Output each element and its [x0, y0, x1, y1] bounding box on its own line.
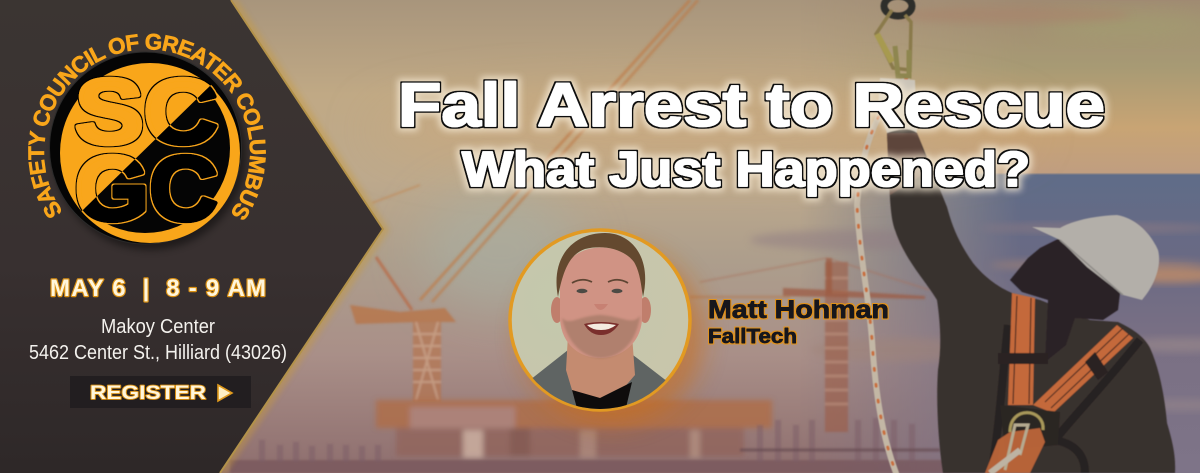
- speaker photo: [510, 230, 704, 425]
- logo letters SC GC, lower half: SC: [75, 61, 218, 163]
- logo letters SC GC, upper half: SC: [75, 61, 218, 163]
- venue address: 5462 Center St., Hilliard (43026): [29, 342, 287, 364]
- ears: [551, 297, 560, 323]
- venue address: [29, 316, 287, 364]
- subtitle: What Just Happened?: [462, 143, 1030, 197]
- body: [887, 129, 1175, 473]
- glove: [878, 78, 917, 135]
- scarf: [1010, 238, 1120, 362]
- platform structure: [376, 400, 772, 458]
- logo letters SC GC, upper half: [74, 76, 210, 212]
- black tee: [572, 382, 632, 412]
- beard: [562, 315, 640, 358]
- left dark panel: [0, 0, 385, 473]
- construction cranes and platform: [350, 0, 930, 432]
- title: Fall Arrest to Rescue: [398, 71, 1105, 139]
- right crane: [690, 258, 930, 432]
- logo letters SC GC, upper half: GC: [75, 138, 218, 240]
- face: [560, 248, 642, 358]
- speaker organization: FallTech: [708, 325, 797, 348]
- buckle and carabiner: [985, 405, 1060, 473]
- date and time: MAY 6 | 8 - 9 AM: [50, 275, 266, 302]
- logo letters SC GC, lower half: GC: [75, 138, 218, 240]
- eyes: [572, 280, 628, 293]
- neck: [566, 342, 635, 398]
- hair: [556, 233, 645, 297]
- orange harness strap diagonal: [1033, 325, 1133, 413]
- hook and ring: [876, 0, 912, 76]
- logo letters SC GC, lower half: [82, 84, 219, 224]
- helmet: [1032, 215, 1159, 300]
- shirt: [532, 350, 666, 409]
- smile: [584, 322, 619, 335]
- logo circular text: SAFETY COUNCIL OF GREATER COLUMBUS: [28, 34, 266, 220]
- speaker name: Matt Hohman: [708, 296, 889, 324]
- orange harness strap vertical: [998, 293, 1048, 405]
- rope: [857, 78, 907, 473]
- logo: Safety Council of Greater Columbus: [28, 34, 266, 252]
- ground and structures: [230, 418, 950, 473]
- venue address: Makoy Center: [101, 316, 215, 338]
- register button: [70, 376, 251, 408]
- logo disc: [50, 52, 242, 244]
- worker: [857, 0, 1175, 473]
- register button: REGISTER: [90, 382, 206, 404]
- harness back and straps: [992, 325, 1140, 473]
- icon: play arrow: [218, 385, 232, 401]
- left crane: [350, 0, 698, 402]
